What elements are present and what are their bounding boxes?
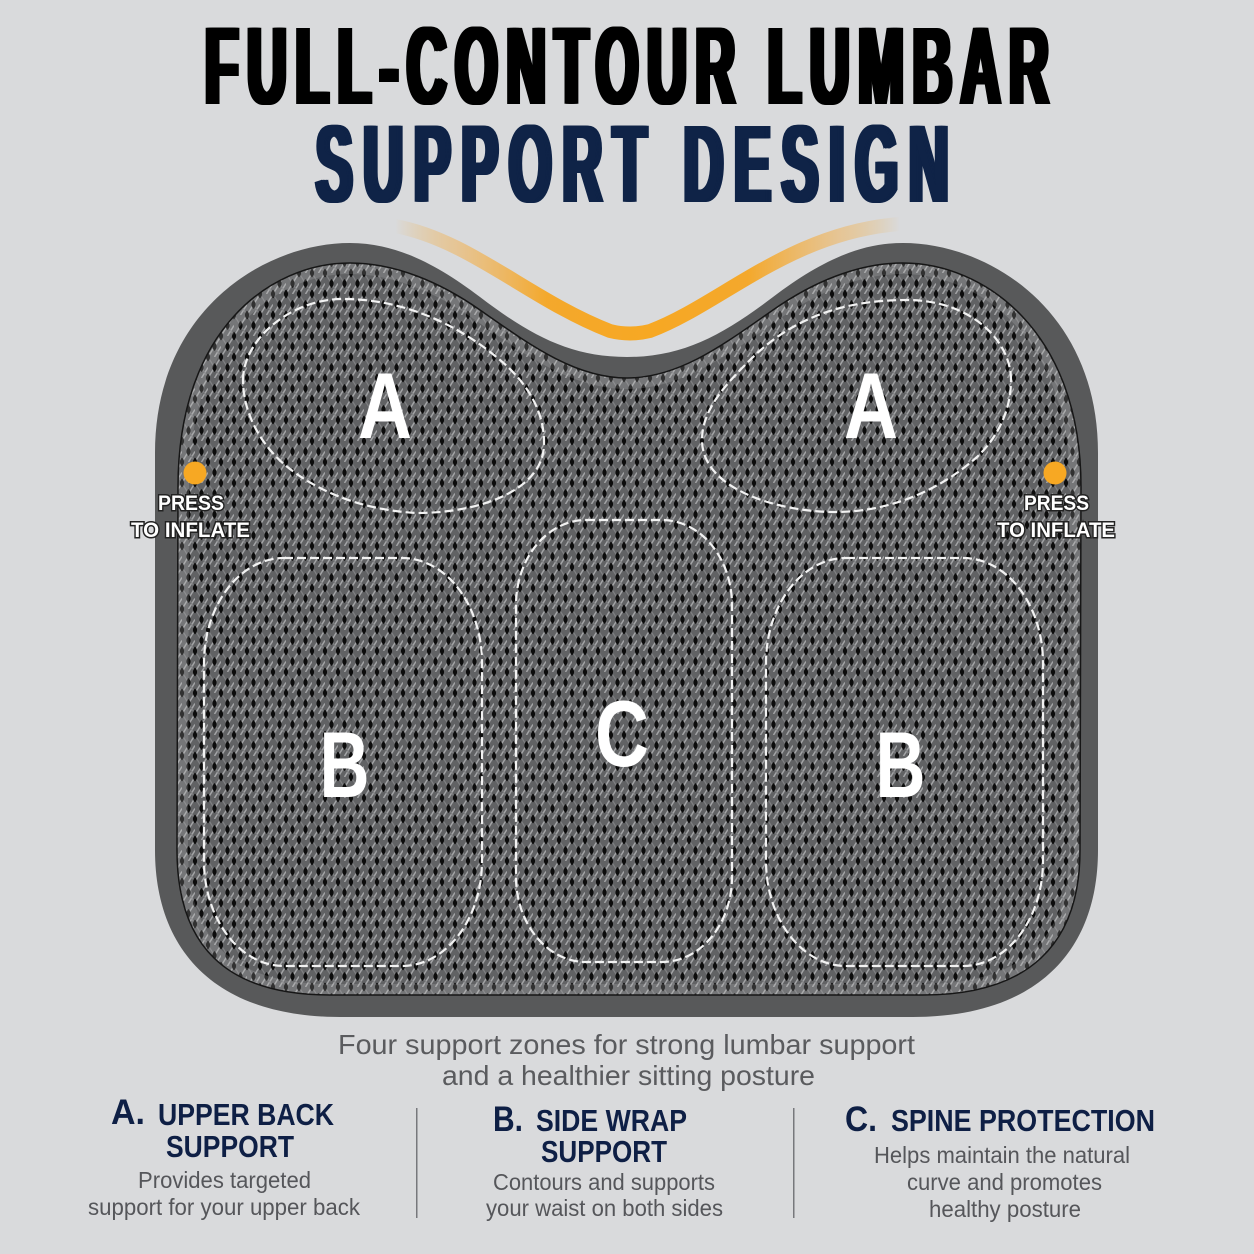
inflate button left xyxy=(131,462,250,542)
column C: Helps maintain the natural xyxy=(874,1142,1130,1168)
inflate button right: PRESS xyxy=(1024,492,1089,515)
column C: curve and promotes xyxy=(907,1169,1102,1195)
divider xyxy=(793,1108,794,1218)
orange contour curve xyxy=(395,224,900,334)
column C xyxy=(845,1100,1155,1222)
column A xyxy=(88,1093,360,1220)
zone C outline xyxy=(516,520,732,962)
column C: healthy posture xyxy=(929,1196,1081,1222)
zone B left outline xyxy=(204,558,482,966)
intro text xyxy=(338,1029,915,1091)
mesh outline xyxy=(177,263,1081,995)
zone B right outline xyxy=(766,558,1043,966)
zone letter A right: A xyxy=(844,353,898,458)
column B: SIDE WRAP xyxy=(536,1103,687,1138)
zone A right outline xyxy=(702,300,1011,512)
column B: Contours and supports xyxy=(493,1169,715,1195)
mesh edge highlight xyxy=(177,263,1081,995)
column C: SPINE PROTECTION xyxy=(891,1103,1155,1138)
column C: C. xyxy=(845,1100,877,1139)
column A: A. xyxy=(111,1093,145,1132)
zone letter A left: A xyxy=(358,353,412,458)
column B: your waist on both sides xyxy=(486,1195,723,1221)
title: SUPPORT DESIGN xyxy=(313,103,957,226)
column B: SUPPORT xyxy=(541,1134,667,1169)
zone letter B left: B xyxy=(320,712,370,817)
intro text: and a healthier sitting posture xyxy=(442,1060,815,1091)
title: FULL-CONTOUR LUMBAR xyxy=(202,5,1054,128)
column A: SUPPORT xyxy=(166,1129,294,1164)
inflate button left: PRESS xyxy=(158,492,224,515)
zone A left outline xyxy=(243,299,544,513)
zone letter C: C xyxy=(595,681,649,786)
divider xyxy=(416,1108,418,1218)
inflate button left: TO INFLATE xyxy=(131,519,250,542)
column A: support for your upper back xyxy=(88,1194,360,1220)
inflate button right xyxy=(997,462,1115,542)
column B xyxy=(486,1100,723,1221)
intro text: Four support zones for strong lumbar support xyxy=(338,1029,915,1060)
cushion mesh xyxy=(177,263,1081,995)
cushion border xyxy=(155,243,1098,1017)
column B: B. xyxy=(493,1100,523,1139)
title xyxy=(202,5,1054,226)
column A: Provides targeted xyxy=(138,1167,311,1193)
cushion xyxy=(155,243,1098,1017)
inflate button right: TO INFLATE xyxy=(997,519,1115,542)
zone letter B right: B xyxy=(876,712,926,817)
column A: UPPER BACK xyxy=(158,1097,335,1132)
